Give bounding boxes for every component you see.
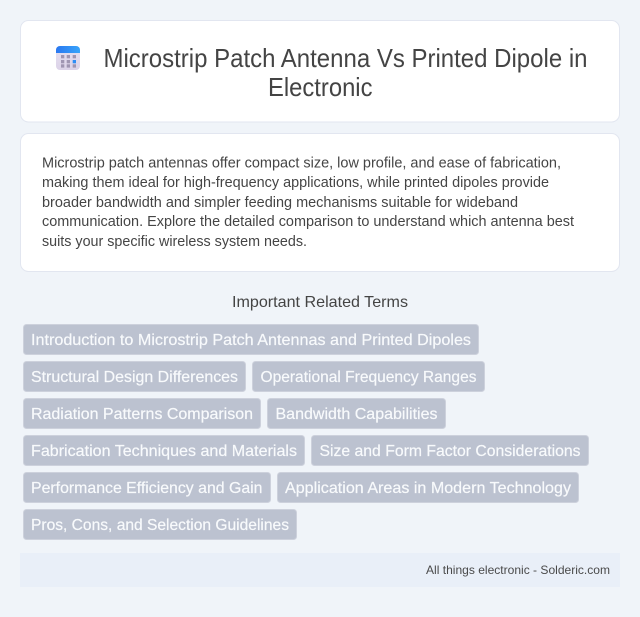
chip: radiation patterns [24,398,260,428]
chip: size and form factor: Size and Form Factor Considerations [320,443,580,460]
chip: application areas [278,472,578,502]
description text: making them ideal for high-frequency applications, while printed dipoles provide [42,175,549,191]
chip: performance [24,472,270,502]
section heading: related terms: Important Related Terms [232,294,408,311]
chip: fabrication: Fabrication Techniques and Materials [31,443,297,460]
chip: size and form factor [312,436,588,466]
chip: frequency ranges: Operational Frequency Ranges [260,369,476,386]
chip: bandwidth [268,398,446,428]
description text [42,156,574,250]
title: Microstrip Patch Antenna Vs Printed Dipole in [104,45,588,73]
related terms chips [24,324,588,540]
chip: bandwidth: Bandwidth Capabilities [276,406,438,423]
title [104,45,588,102]
panel: title card [20,20,620,122]
title: Electronic [268,74,373,102]
chip: fabrication [24,436,304,466]
chip: introduction [24,324,478,354]
chip: application areas: Application Areas in Modern Technology [285,480,571,497]
chip: structural design [24,362,246,392]
chip: pros and cons: Pros, Cons, and Selection Guidelines [31,517,289,534]
chip: introduction: Introduction to Microstrip Patch Antennas and Printed Dipoles [31,332,471,349]
chip: structural design: Structural Design Differences [31,369,238,386]
description text: suits your specific wireless system needs. [42,234,307,250]
chip: radiation patterns: Radiation Patterns Comparison [31,406,253,423]
chip: frequency ranges [252,362,484,392]
icon: calendar [56,46,80,70]
chip: performance: Performance Efficiency and Gain [31,480,262,497]
panel: description card [20,134,620,272]
footer: All things electronic - Solderic.com [426,563,610,577]
description text: communication. Explore the detailed comparison to understand which antenna best [42,214,574,230]
description text: Microstrip patch antennas offer compact size, low profile, and ease of fabrication, [42,156,561,172]
chip: pros and cons [24,510,296,540]
description text: broader bandwidth and simpler feeding mechanisms suitable for wideband [42,195,518,211]
footer [20,553,620,587]
